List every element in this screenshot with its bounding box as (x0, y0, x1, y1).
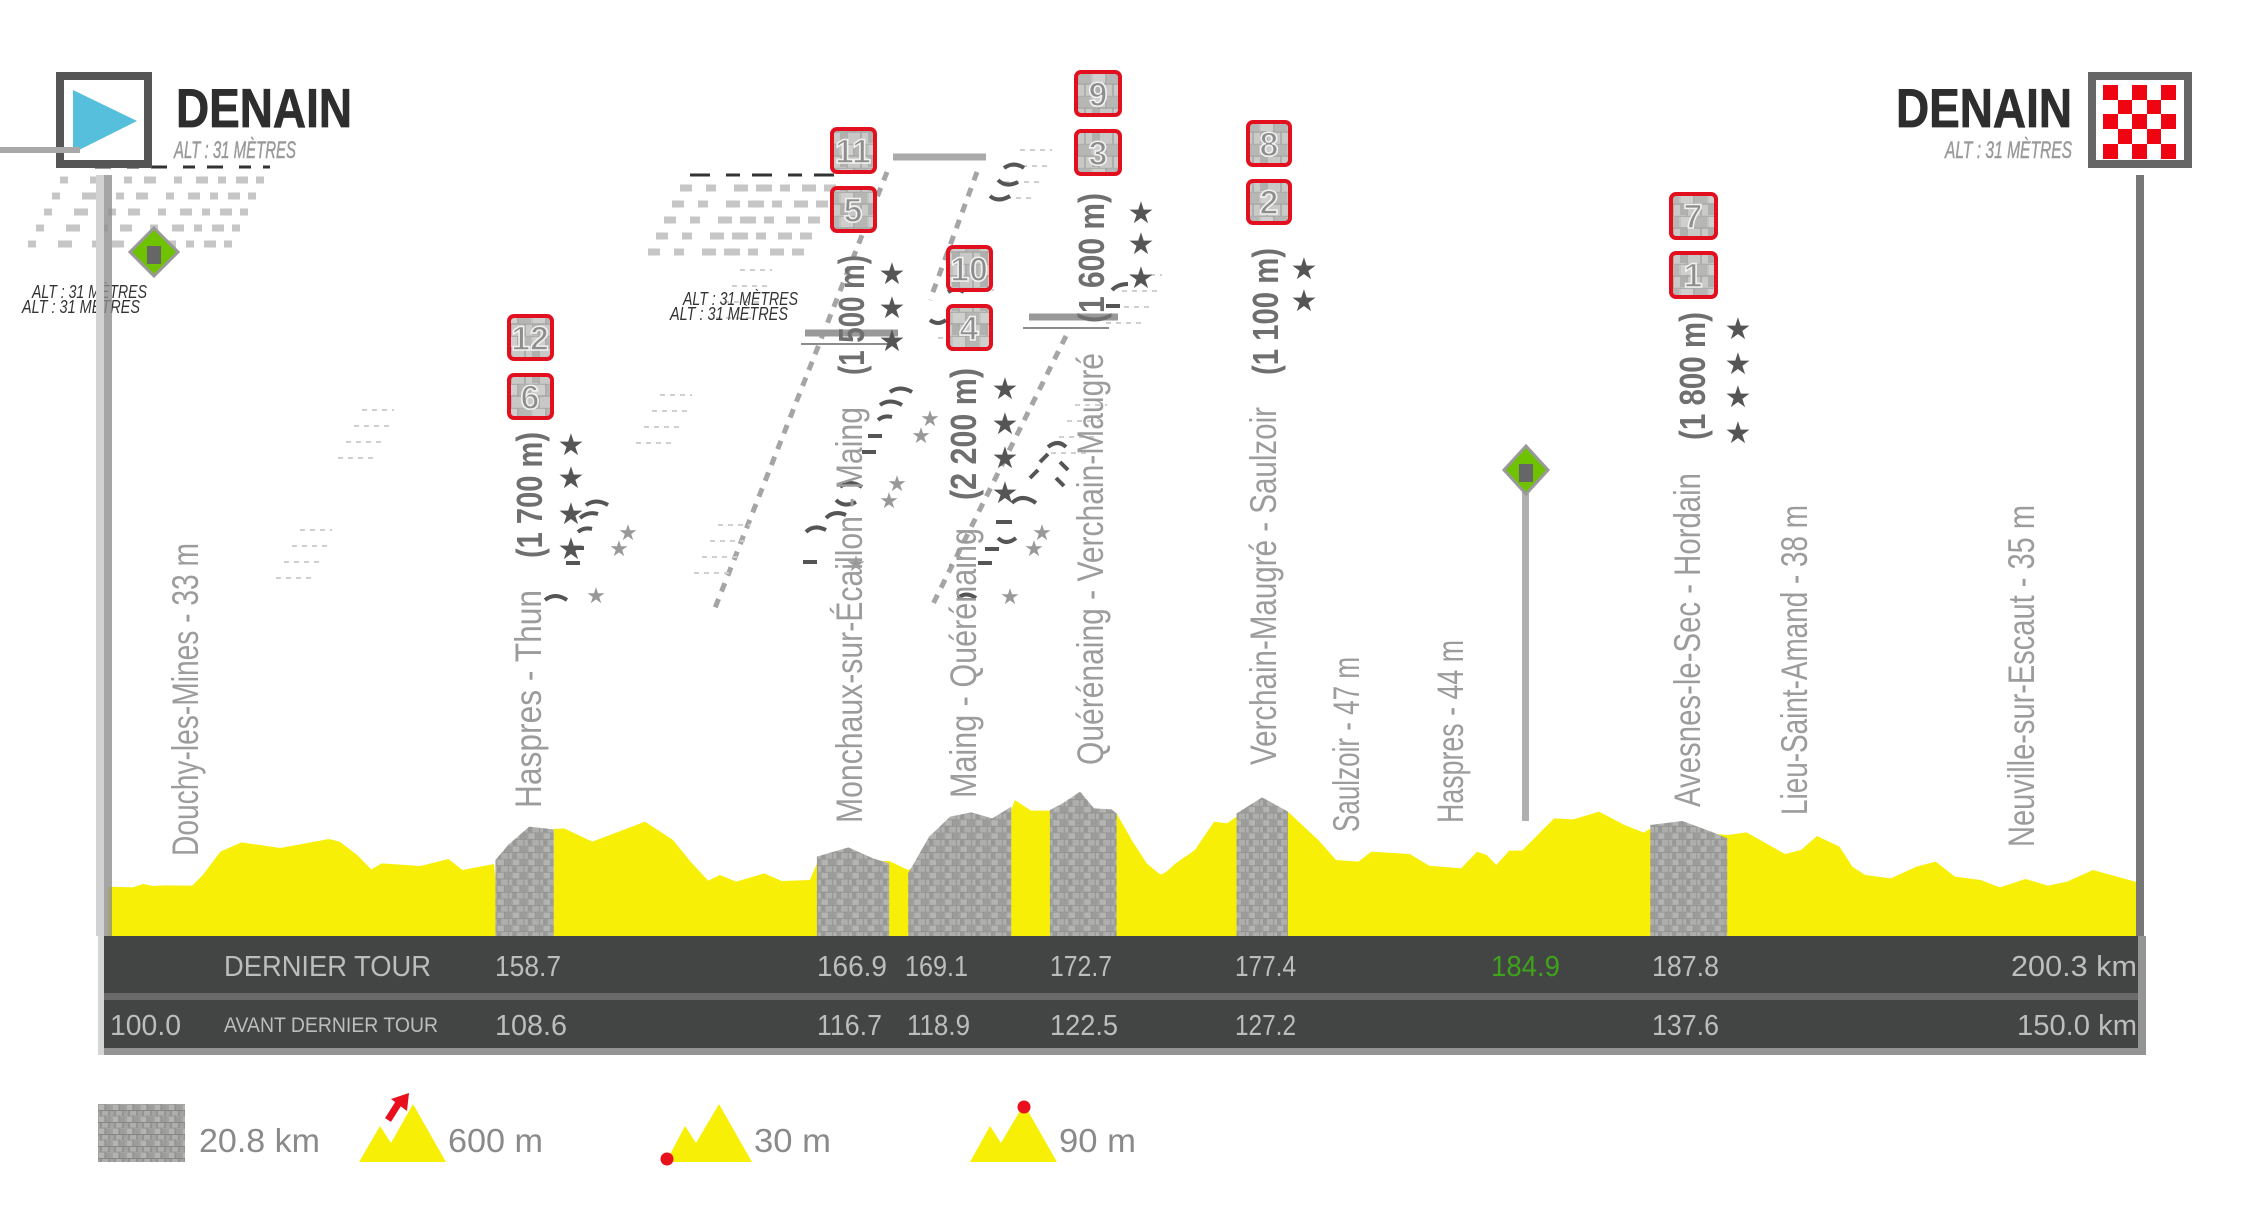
sheared ghost fragments: ★ (618, 521, 638, 546)
row: avant dernier tour: 100.0 (110, 1010, 181, 1042)
elevation profile, part 1 (108, 792, 1180, 936)
row: avant dernier tour: 122.5 (1050, 1010, 1118, 1042)
sheared ghost fragments: ★ (911, 424, 931, 449)
row: avant dernier tour: 150.0 km (2017, 1010, 2137, 1042)
row: avant dernier tour: 108.6 (495, 1010, 567, 1042)
sector length: (1 100 m) (1245, 248, 1286, 375)
cobbled sector: Avesnes (1650, 821, 1727, 936)
sector badge 9: 9 (1089, 76, 1107, 114)
sector: Haspres - Thun (508, 316, 584, 808)
feed zone marker and pole, 184.9 (1504, 446, 1548, 821)
difficulty stars: ★ (558, 461, 584, 496)
sector badge 1: 1 (1684, 257, 1702, 295)
sector: Maing - Quérénaing (943, 247, 1018, 798)
sheared altitude text, left: ALT : 31 MÈTRES (31, 282, 147, 302)
row: avant dernier tour: AVANT DERNIER TOUR (224, 1014, 438, 1037)
sector badge 5 (832, 188, 875, 231)
cobbled sector: Maing (908, 807, 1011, 936)
difficulty stars: ★ (992, 372, 1018, 407)
sector: Quérénaing - Verchain-Maugré (1070, 72, 1154, 765)
sector: Verchain-Maugré - Saulzoir (1243, 122, 1317, 765)
row: dernier tour: DERNIER TOUR (224, 951, 431, 983)
difficulty stars: ★ (879, 291, 905, 326)
difficulty stars (558, 428, 584, 567)
difficulty stars: ★ (1725, 312, 1751, 347)
sector badge 8: 8 (1260, 126, 1278, 164)
distance table (98, 936, 2146, 1055)
sector badge 3: 3 (1089, 135, 1107, 173)
row: avant dernier tour: 137.6 (1652, 1010, 1719, 1042)
town label: Neuville-sur-Escaut: Neuville-sur-Escaut - 35 m (2001, 505, 2042, 847)
sector badge 5: 5 (844, 192, 862, 230)
row: dernier tour: 184.9 (1491, 951, 1560, 983)
sector badge 2 (1248, 181, 1290, 223)
start pole (96, 175, 112, 936)
sector name: Verchain-Maugré - Saulzoir (1243, 407, 1284, 765)
start title: ALT : 31 MÈTRES (173, 137, 296, 164)
sector name: Maing - Quérénaing (943, 528, 984, 798)
difficulty stars: ★ (1725, 347, 1751, 382)
row: dernier tour: 158.7 (495, 951, 561, 983)
legend: cobbles total: 20.8 km (199, 1122, 320, 1159)
start title: DENAIN (176, 77, 352, 139)
sheared ghost fragments: ★ (887, 472, 907, 497)
sheared ghost fragments: ★ (920, 407, 940, 432)
row: dernier tour: 177.4 (1235, 951, 1296, 983)
difficulty stars (992, 372, 1018, 511)
sector name: Quérénaing - Verchain-Maugré (1070, 353, 1111, 765)
feed zone marker, start (130, 228, 178, 276)
legend: maximum altitude: 90 m (1059, 1122, 1136, 1159)
difficulty stars: ★ (1291, 252, 1317, 287)
difficulty stars: ★ (1128, 227, 1154, 262)
difficulty stars: ★ (1725, 380, 1751, 415)
difficulty stars: ★ (1128, 261, 1154, 296)
sector length: (1 800 m) (1672, 312, 1713, 440)
difficulty stars: ★ (558, 497, 584, 532)
sector badge 7 (1671, 194, 1716, 238)
sector badge 10: 10 (950, 251, 988, 289)
elevation profile, part 2 (1150, 797, 2142, 936)
row: dernier tour: 169.1 (905, 951, 968, 983)
finish title: ALT : 31 MÈTRES (1944, 137, 2072, 164)
difficulty stars (1291, 252, 1317, 319)
sheared altitude text, centre: ALT : 31 MÈTRES (682, 289, 798, 309)
sector name: Monchaux-sur-Écaillon - Maing (829, 407, 870, 823)
sector badge 11: 11 (835, 133, 871, 171)
start title (173, 77, 352, 164)
legend: cobbles total (98, 1104, 320, 1162)
difficulty stars: ★ (992, 476, 1018, 511)
difficulty stars: ★ (879, 257, 905, 292)
start flag icon (0, 76, 148, 164)
difficulty stars: ★ (558, 532, 584, 567)
sector name: Avesnes-le-Sec - Hordain (1667, 473, 1708, 807)
finish title (1896, 77, 2072, 164)
sector badge 12: 12 (511, 320, 549, 358)
difficulty stars: ★ (1291, 284, 1317, 319)
sector badge 4 (948, 306, 991, 349)
sector badge 2: 2 (1260, 184, 1278, 222)
difficulty stars (1128, 196, 1154, 296)
sector length: (1 600 m) (1071, 193, 1112, 323)
sheared altitude text, centre (669, 289, 798, 324)
sector length: (2 200 m) (943, 368, 984, 500)
sector badge 1 (1671, 253, 1716, 297)
cobbled sector: Quérénaing (1050, 792, 1117, 936)
difficulty stars: ★ (992, 407, 1018, 442)
row: dernier tour: 200.3 km (2011, 951, 2137, 983)
row: dernier tour: 172.7 (1050, 951, 1112, 983)
difficulty stars: ★ (1725, 416, 1751, 451)
cobbled sector: Monchaux (817, 847, 889, 936)
finish title: DENAIN (1896, 77, 2072, 139)
sector name: Haspres - Thun (508, 590, 549, 808)
sector badge 8 (1248, 122, 1290, 165)
row: avant dernier tour: 118.9 (907, 1010, 970, 1042)
finish flag icon (2092, 76, 2188, 164)
town label: Douchy-les-Mines: Douchy-les-Mines - 33 m (165, 543, 206, 856)
difficulty stars: ★ (1128, 196, 1154, 231)
difficulty stars: ★ (879, 324, 905, 359)
town label: Haspres: Haspres - 44 m (1430, 640, 1471, 823)
difficulty stars: ★ (992, 441, 1018, 476)
town label: Lieu-Saint-Amand: Lieu-Saint-Amand - 38 m (1774, 505, 1815, 815)
sector badge 9 (1076, 72, 1120, 115)
sheared altitude text, centre: ALT : 31 MÈTRES (669, 304, 788, 324)
row: avant dernier tour (110, 1010, 2137, 1042)
sector length: (1 700 m) (509, 432, 550, 558)
legend: elevation gain: 600 m (448, 1122, 543, 1159)
sheared ghost fragments: ★ (846, 552, 866, 577)
legend: elevation gain (359, 1093, 543, 1162)
row: dernier tour: 166.9 (817, 951, 887, 983)
sheared ghost fragments: ★ (1024, 537, 1044, 562)
difficulty stars: ★ (558, 428, 584, 463)
difficulty stars (1725, 312, 1751, 451)
sheared ghost fragments (28, 150, 1162, 610)
row: dernier tour: 187.8 (1652, 951, 1719, 983)
sheared altitude text, left: ALT : 31 MÈTRES (21, 297, 140, 317)
row: avant dernier tour: 127.2 (1235, 1010, 1296, 1042)
legend: minimum altitude: 30 m (754, 1122, 831, 1159)
sector badge 3 (1076, 131, 1120, 174)
sector badge 6: 6 (521, 379, 539, 417)
finish pole (2136, 175, 2144, 936)
sector badge 4: 4 (960, 310, 979, 348)
legend: maximum altitude (970, 1100, 1136, 1162)
sector length: (1 500 m) (831, 255, 872, 375)
row: dernier tour (224, 951, 2137, 983)
sheared ghost fragments: ★ (609, 537, 629, 562)
sheared ghost fragments: ★ (1000, 585, 1020, 610)
sheared ghost fragments: ★ (1032, 521, 1052, 546)
sector: Avesnes-le-Sec - Hordain (1667, 194, 1751, 807)
cobbled sector: Verchain (1237, 797, 1288, 936)
sheared altitude text, left (21, 282, 147, 317)
sector badge 6 (509, 375, 552, 418)
sector badge 7: 7 (1684, 198, 1702, 236)
difficulty stars (879, 257, 905, 359)
sheared ghost fragments: ★ (586, 584, 606, 609)
legend: minimum altitude (660, 1104, 831, 1166)
town label: Saulzoir: Saulzoir - 47 m (1326, 657, 1367, 832)
sector: Monchaux-sur-Écaillon - Maing (829, 129, 905, 823)
sheared ghost fragments: ★ (879, 489, 899, 514)
row: avant dernier tour: 116.7 (817, 1010, 882, 1042)
cobbled sector: Haspres (495, 827, 554, 936)
